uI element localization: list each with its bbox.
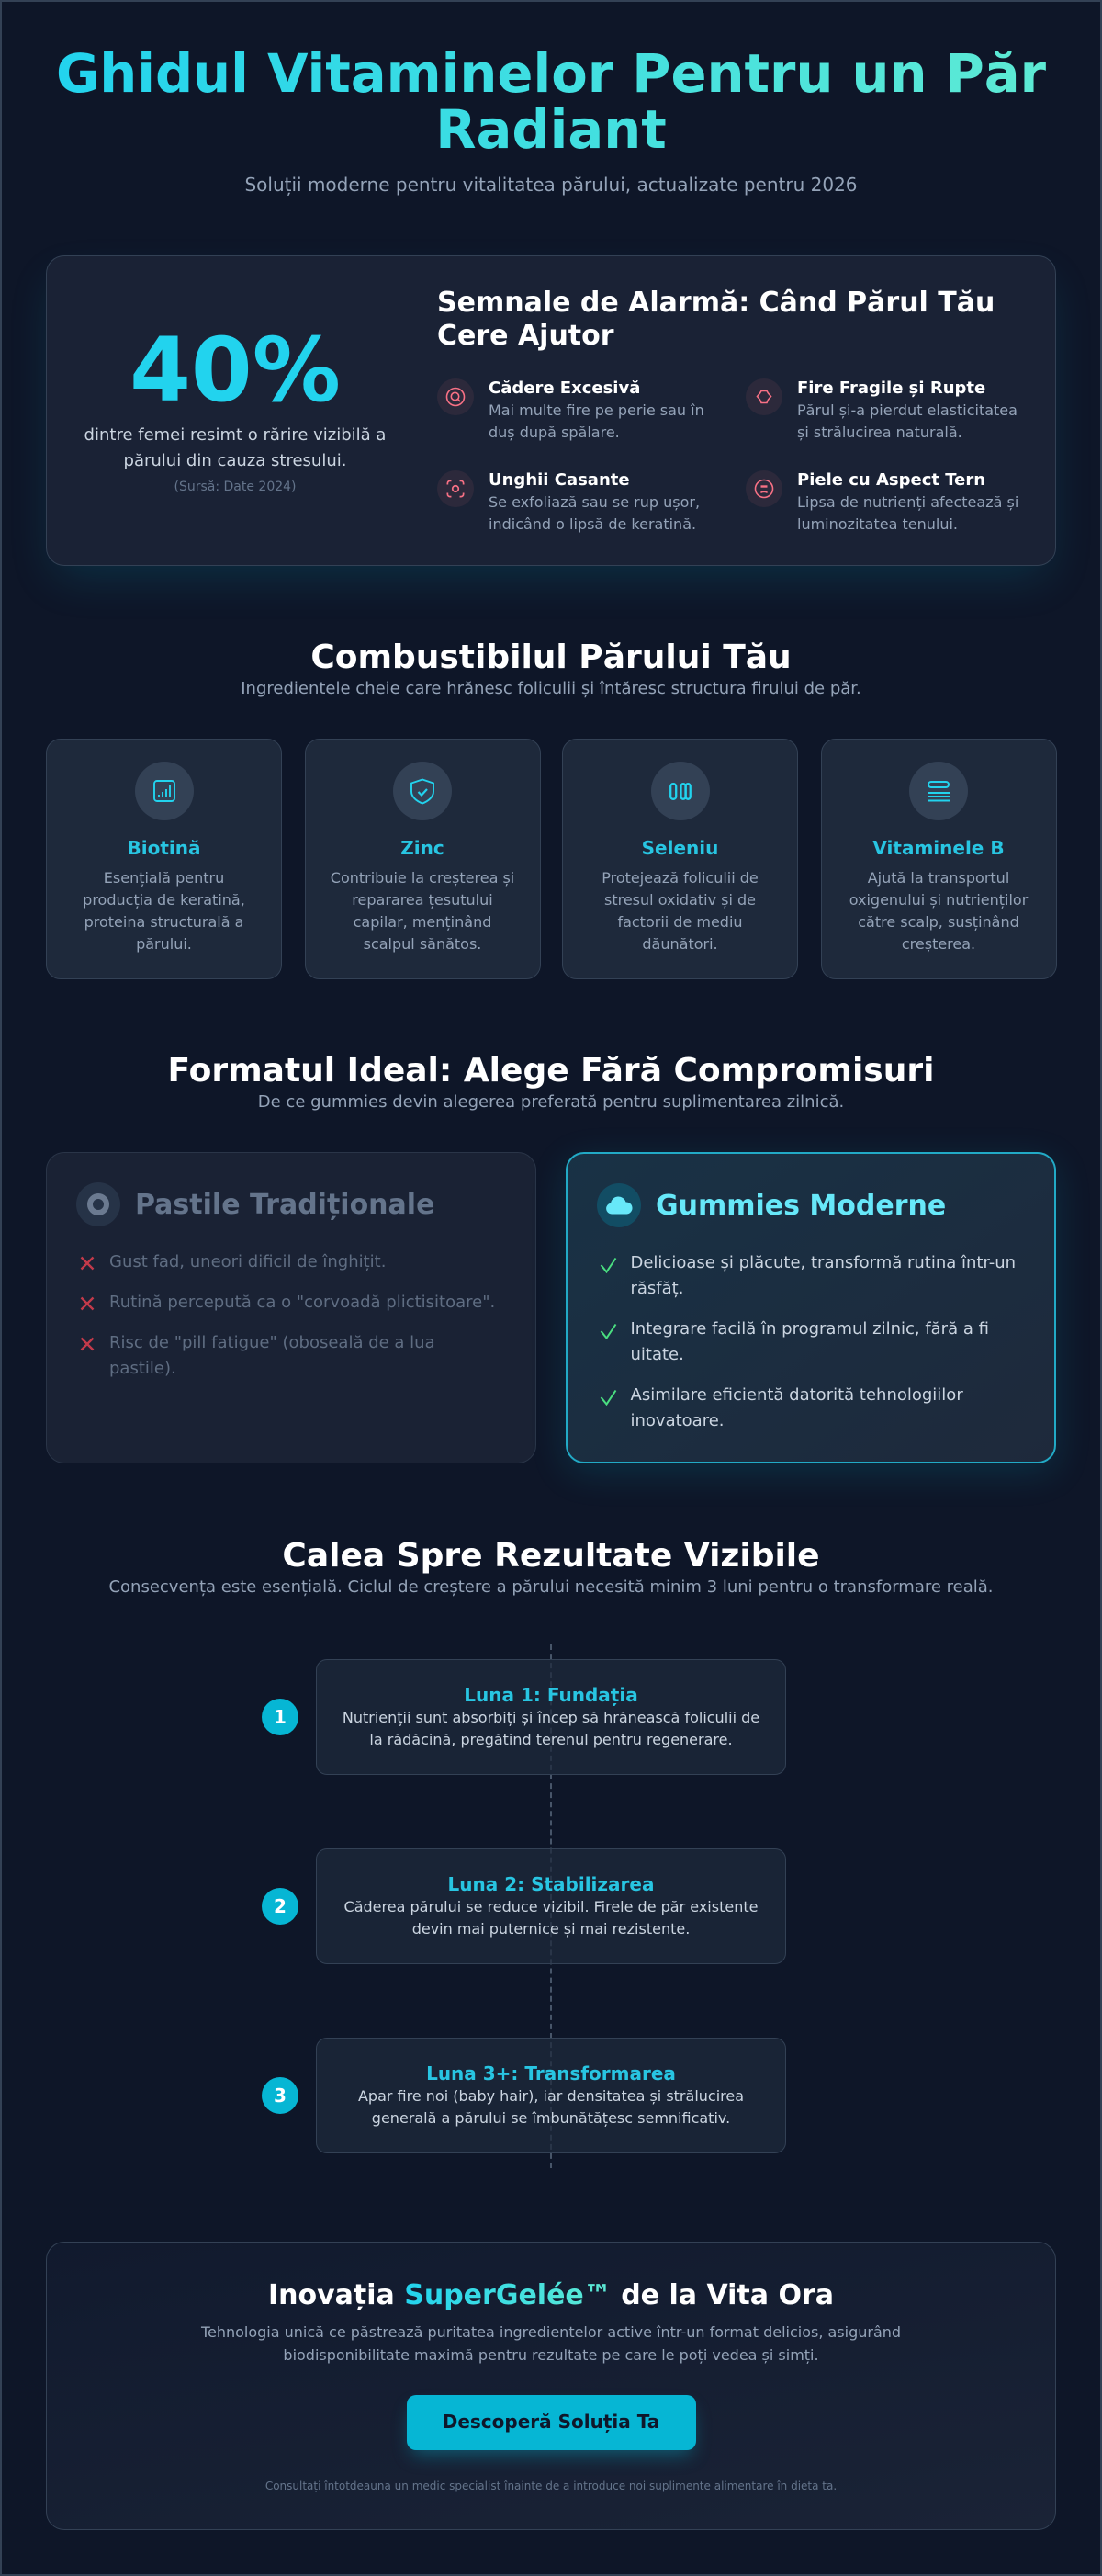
CTA description [200,2323,901,2364]
card: selenium: dăunători. [642,935,718,953]
card: vitamins B: oxigenului și nutrienților [849,891,1028,909]
card: biotin: Biotină [127,837,200,859]
card: selenium: factorii de mediu [617,913,743,931]
card: zinc: repararea țesutului [352,891,493,909]
card: selenium: Seleniu [642,837,718,859]
step 2 card: Căderea părului se reduce vizibil. Firele de păr existente [344,1898,758,1915]
signal: brittle nails: indicând o lipsă de keratină. [489,515,696,533]
cross list [81,1252,495,1378]
check list: Integrare facilă în programul zilnic, fără a fi [630,1319,989,1339]
card: biotin: proteina structurală a [84,913,243,931]
card: selenium: stresul oxidativ și de [604,891,756,909]
check list: răsfăț. [630,1279,683,1298]
card: vitamins B: către scalp, susținând [858,913,1019,931]
step 1 card: Nutrienții sunt absorbiți și încep să hrănească foliculii de [343,1709,759,1726]
signal: hair loss [437,378,704,441]
card: selenium: Protejează foliculii de [602,869,759,887]
CTA description: biodisponibilitate maximă pentru rezultate pe care le poți vedea și simți. [283,2346,819,2364]
icon: stacked lines [909,762,968,820]
signal: hair loss: Mai multe fire pe perie sau în [489,401,704,419]
title: Radiant [435,99,667,161]
icon: chart [134,762,193,820]
heading: alarm signals [437,287,995,352]
step 1 card [316,1659,786,1775]
card: vitamins B: creșterea. [902,935,975,953]
signal: brittle strands: și strălucirea naturală. [797,424,962,441]
step 3 card: Luna 3+: Transformarea [426,2062,676,2085]
signal: dull skin: Piele cu Aspect Tern [797,470,985,490]
heading: format section: Formatul Ideal: Alege Fără Compromisuri [168,1052,934,1090]
heading: alarm signals: Cere Ajutor [437,320,614,352]
check list [601,1253,1016,1430]
big stat 40%: 40% [129,319,341,422]
cross list: pastile). [109,1359,176,1378]
icon: check [601,1258,617,1273]
step 3 card: Apar fire noi (baby hair), iar densitatea și strălucirea [358,2087,744,2105]
step 3 card: generală a părului se îmbunătățesc semnificativ. [372,2109,730,2127]
icon: check [601,1390,617,1406]
subtitle: Soluții moderne pentru vitalitatea părului, actualizate pentru 2026 [244,174,858,196]
heading: fuel section: Combustibilul Părului Tău [310,638,792,676]
step 3 card [316,2038,786,2153]
stat description: părului din cauza stresului. [124,451,346,470]
card: zinc: scalpul sănătos. [364,935,481,953]
signal: brittle nails: Unghii Casante [489,470,630,490]
timeline dashed line [550,1644,552,2168]
icon: pill ring [76,1182,120,1226]
icon: magnifier [437,378,474,415]
step 2 card [316,1848,786,1964]
icon: cross [81,1257,94,1270]
signal: dull skin [746,470,1018,533]
icon: cloud [597,1183,641,1227]
stat source: (Sursă: Date 2024) [174,480,297,494]
icon: capsules [650,762,709,820]
panel: modern gummies [566,1152,1056,1463]
signal: brittle strands: Părul și-a pierdut elasticitatea [797,401,1018,419]
icon: shield check [393,762,452,820]
check list: inovatoare. [630,1411,725,1430]
step 3 number [262,2077,298,2114]
panel: call to action [46,2242,1056,2530]
signal: dull skin: Lipsa de nutrienți afectează și [797,493,1018,511]
icon: cross [81,1297,94,1310]
heading: alarm signals: Semnale de Alarmă: Când Părul Tău [437,287,995,319]
card: selenium [562,739,798,979]
card: biotin: părului. [136,935,192,953]
panel heading: Pastile Tradiționale [135,1189,434,1221]
card: vitamins B [821,739,1056,979]
subheading: fuel section: Ingredientele cheie care hrănesc foliculii și întăresc structura firului de păr. [241,679,861,698]
step 3 number: 3 [274,2085,287,2107]
CTA button [406,2395,696,2450]
card: biotin: Esențială pentru [104,869,224,887]
step 2 number [262,1888,298,1925]
icon: focus ring [437,470,474,507]
icon: fragile strand [746,378,782,415]
step 2 card: devin mai puternice și mai rezistente. [412,1920,690,1938]
card: zinc: capilar, menținând [354,913,491,931]
icon: sad face [746,470,782,507]
step 2 card: Luna 2: Stabilizarea [448,1873,654,1895]
subheading: results section: Consecvența este esențială. Ciclul de creștere a părului necesită minim 3 luni pentru o transformare reală. [108,1577,994,1597]
check list: Delicioase și plăcute, transformă rutina într-un [630,1253,1016,1272]
step 1 card: la rădăcină, pregătind terenul pentru regenerare. [369,1731,733,1748]
signal: brittle nails [437,470,700,533]
icon: check [601,1324,617,1339]
signal: brittle strands: Fire Fragile și Rupte [797,378,985,398]
cross list: Gust fad, uneori dificil de înghițit. [109,1252,386,1271]
card: zinc: Contribuie la creșterea și [331,869,514,887]
signal: dull skin: luminozitatea tenului. [797,515,958,533]
CTA heading: Inovația SuperGelée™ de la Vita Ora [268,2279,834,2311]
signal: hair loss: Cădere Excesivă [489,378,640,398]
check list: uitate. [630,1345,684,1364]
cross list: Risc de "pill fatigue" (oboseală de a lua [109,1333,435,1352]
icon: cross [81,1338,94,1350]
disclaimer: Consultați întotdeauna un medic specialist înainte de a introduce noi suplimente alimentare în dieta ta. [265,2480,837,2492]
signal: brittle nails: Se exfoliază sau se rup ușor, [489,493,700,511]
step 1 number: 1 [274,1706,287,1728]
step 1 number [262,1699,298,1735]
card: vitamins B: Vitaminele B [872,837,1005,859]
stat description [84,425,386,470]
card: vitamins B: Ajută la transportul [868,869,1009,887]
subheading: format section: De ce gummies devin alegerea preferată pentru suplimentarea zilnică. [258,1092,844,1112]
stat description: dintre femei resimt o rărire vizibilă a [84,425,386,445]
signal: brittle strands [746,378,1018,441]
step 1 card: Luna 1: Fundația [464,1684,638,1706]
heading: results section: Calea Spre Rezultate Vizibile [282,1537,820,1575]
signal: hair loss: duș după spălare. [489,424,620,441]
check list: Asimilare eficientă datorită tehnologiilor [630,1385,963,1405]
title [46,46,1056,158]
panel heading: Gummies Moderne [656,1190,946,1222]
card: biotin [46,739,282,979]
panel: traditional pills [46,1152,536,1463]
card: biotin: producția de keratină, [83,891,245,909]
card: zinc [305,739,540,979]
cross list: Rutină percepută ca o "corvoadă plictisitoare". [109,1293,495,1312]
panel: hero alarm signals [46,255,1056,566]
CTA description: Tehnologia unică ce păstrează puritatea ingredientelor active într-un format delicios, asigurând [201,2323,901,2341]
step 2 number: 2 [274,1895,287,1917]
card: zinc: Zinc [400,837,444,859]
title: Ghidul Vitaminelor Pentru un Păr [56,43,1046,105]
CTA button: Descoperă Soluția Ta [443,2411,659,2433]
